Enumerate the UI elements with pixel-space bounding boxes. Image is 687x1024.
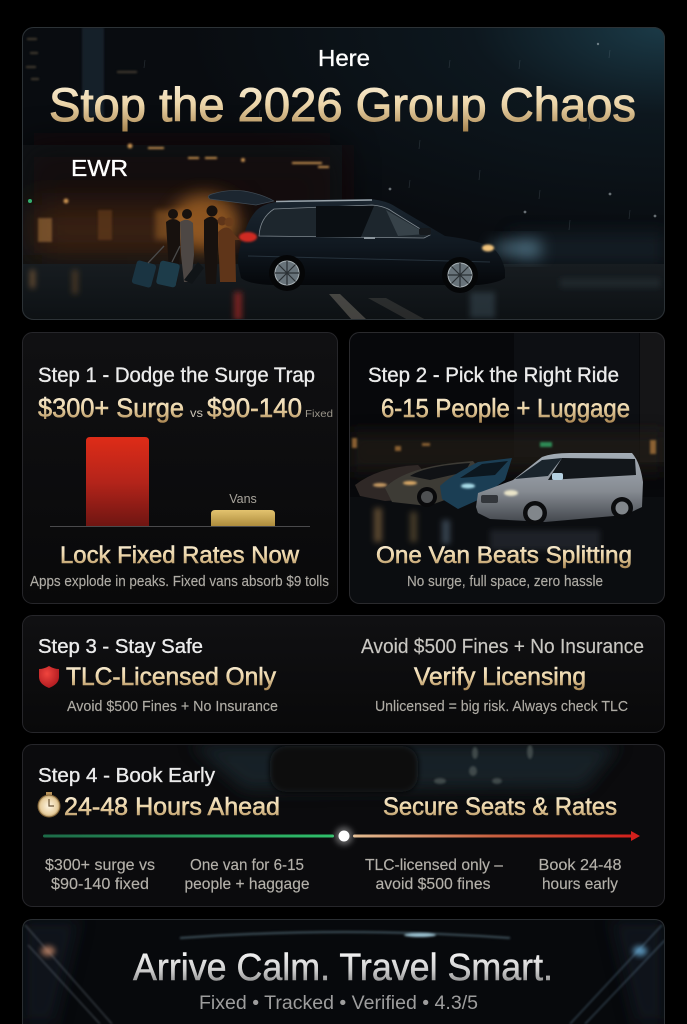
step 1 heading: Step 1 - Dodge the Surge Trap [38,364,315,387]
panel: step 4 book early [22,744,665,907]
footer tagline: Fixed • Tracked • Verified • 4.3/5 [199,993,478,1014]
footer border [22,920,664,1024]
icon: stopwatch [38,792,60,817]
timeline label 1: $300+ surge vs [45,857,155,874]
bar: vans [211,510,275,527]
panel: footer [22,919,665,1024]
timeline arrow [43,827,640,845]
timeline label 2: One van for 6-15 [190,857,304,874]
panel: step 1 surge trap [22,332,338,604]
surge versus fixed price line [38,393,333,423]
timeline label 4: hours early [542,876,618,893]
footer headline: Arrive Calm. Travel Smart. [133,947,553,989]
surge versus fixed price line: vs [190,406,203,420]
van open tailgate [208,190,274,205]
group of travellers with luggage [131,206,240,288]
step 4 heading: Step 4 - Book Early [38,765,215,787]
timeline label 3: avoid $500 fines [376,876,490,893]
hero label: Here: Here [318,45,370,71]
step 3 right caption: Unlicensed = big risk. Always check TLC [375,699,628,715]
surge versus fixed price line: Fixed [305,409,333,420]
step 4 card background [22,744,665,907]
step 3 heading: Step 3 - Stay Safe [38,636,203,658]
24-48 hours heading: 24-48 Hours Ahead [64,793,280,821]
bar chart: surge vs vans [50,437,310,527]
bar label: vans: Vans [229,492,257,506]
timeline label 3: TLC-licensed only – [365,857,503,874]
timeline label 2: people + haggage [184,876,310,893]
van body [238,199,505,293]
surge versus fixed price line: $90-140 [207,393,302,423]
icon: red shield [39,666,59,688]
step 2 capacity line: 6-15 People + Luggage [381,393,630,423]
icon: headlight beam [492,240,540,258]
panel: hero [22,27,665,320]
bar: surge [86,437,149,527]
surge versus fixed price line: $300+ Surge [38,393,184,423]
step 4 card border [22,744,664,906]
panel: step 3 stay safe [22,616,664,732]
step 2 caption: No surge, full space, zero hassle [407,574,603,590]
timeline label 1: $90-140 fixed [51,876,149,893]
hero border [22,28,664,320]
step 1 call to action: Lock Fixed Rates Now [60,542,300,569]
hero photo: night street with van [22,27,665,320]
step 3 left caption: Avoid $500 Fines + No Insurance [67,699,278,715]
timeline label 4: Book 24-48 [538,857,622,874]
far vans [355,458,512,509]
step 1 card [22,332,338,604]
step 3 right heading: Avoid $500 Fines + No Insurance [361,636,644,658]
hero label: EWR: EWR [71,155,128,181]
footer light streaks [22,919,665,1024]
step 3 card [22,616,664,732]
step 1 caption: Apps explode in peaks. Fixed vans absorb $9 tolls [30,574,329,590]
panel: step 2 right ride [349,332,665,604]
step 2 call to action: One Van Beats Splitting [376,542,632,569]
TLC licensed heading: TLC-Licensed Only [66,663,276,691]
step 2 heading: Step 2 - Pick the Right Ride [368,364,619,387]
silver van [476,453,643,525]
hero title: Stop the 2026 Group Chaos [49,78,636,131]
step 2 van fleet photo [349,332,665,604]
step 2 card border [350,332,664,604]
secure seats heading: Secure Seats & Rates [383,793,617,821]
verify licensing heading: Verify Licensing [414,663,586,691]
